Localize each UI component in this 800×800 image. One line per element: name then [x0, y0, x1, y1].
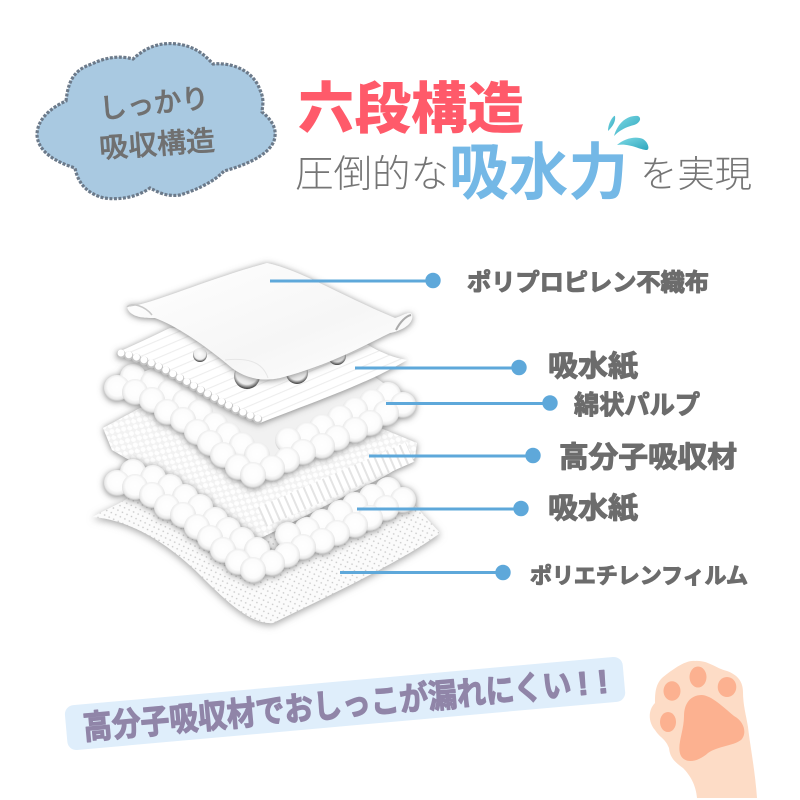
callout: absorbent paper lower	[357, 492, 638, 525]
layer: polyethylene film	[93, 498, 440, 623]
marker	[525, 448, 541, 463]
banner	[64, 656, 626, 751]
leader line	[386, 402, 550, 405]
marker	[511, 360, 527, 375]
left toe pad	[664, 681, 680, 701]
cloud badge	[37, 44, 275, 199]
leader line	[340, 571, 503, 574]
callout: fluff pulp	[386, 390, 700, 420]
marker	[513, 501, 529, 516]
lower toe pad	[660, 712, 676, 732]
layer: polypropylene nonwoven	[127, 263, 412, 380]
leader line	[355, 366, 519, 370]
cloud text: top: しっかり	[98, 82, 210, 125]
main pad	[679, 695, 744, 761]
marker	[425, 273, 441, 288]
leader line	[357, 508, 521, 510]
icon: water splash	[608, 116, 648, 150]
label: 綿状パルプ	[574, 390, 700, 420]
leader line	[369, 454, 533, 458]
marker	[542, 395, 558, 411]
cloud text: bottom: 吸収構造	[98, 125, 216, 164]
label: 高分子吸収材	[559, 441, 737, 474]
diaper layer stack	[93, 263, 440, 623]
title: six-layer structure: 六段構造	[298, 78, 524, 140]
callout: polyethylene film	[340, 564, 748, 588]
cloud shape	[37, 44, 275, 199]
banner background	[64, 656, 626, 751]
callout: polymer absorber	[369, 441, 737, 474]
paw and arm	[650, 661, 757, 798]
water droplets	[193, 347, 346, 389]
leader line	[270, 280, 433, 282]
top toe pad	[690, 666, 706, 688]
layer: polymer absorber	[103, 395, 417, 540]
marker	[495, 565, 511, 580]
label: ポリエチレンフィルム	[530, 564, 748, 588]
layer: lower paper balls	[104, 459, 416, 583]
layer: upper absorbent paper	[118, 328, 407, 423]
icon: cat paw	[650, 661, 757, 798]
callout: polypropylene	[270, 270, 709, 296]
label: 吸水紙	[548, 492, 638, 525]
callout: absorbent paper upper	[355, 350, 638, 383]
subtitle right: を実現	[640, 154, 752, 195]
banner text: 高分子吸収材でおしっこが漏れにくい	[82, 666, 573, 746]
label: 吸水紙	[548, 350, 638, 383]
right toe pad	[718, 677, 736, 697]
banner exclamation marks: !!	[576, 662, 619, 702]
layer: upper pulp balls	[104, 345, 416, 488]
subtitle highlight: 吸水力	[449, 139, 628, 208]
subtitle	[295, 139, 752, 208]
subtitle left: 圧倒的な	[295, 154, 449, 196]
label: ポリプロピレン不織布	[467, 270, 709, 296]
